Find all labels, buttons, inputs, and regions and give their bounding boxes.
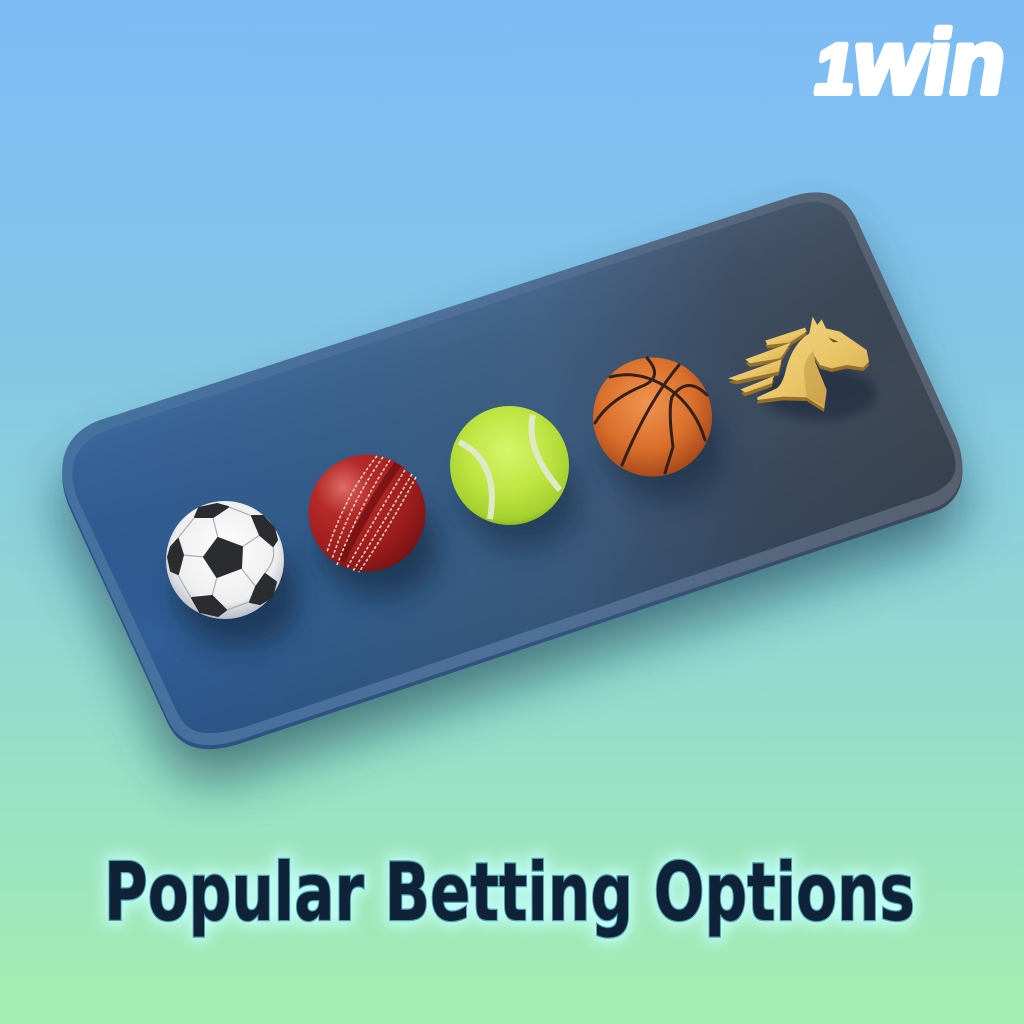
panel thickness edge xyxy=(62,196,962,749)
icon: basketball xyxy=(593,358,726,501)
panel drop shadow xyxy=(62,227,962,780)
panel face xyxy=(72,202,955,733)
horse neck shade and eye xyxy=(804,337,838,407)
icon: soccer ball xyxy=(166,501,300,646)
icon: tennis ball xyxy=(450,406,582,549)
horse body xyxy=(728,317,869,408)
title xyxy=(104,846,915,939)
icon: golden horse xyxy=(728,317,877,420)
horse shadow xyxy=(763,367,877,420)
logo: 1win: 1win xyxy=(809,13,1014,113)
panel rim xyxy=(62,192,962,745)
panel: sports tray xyxy=(62,192,962,780)
horse depth xyxy=(728,320,869,412)
icon: cricket ball xyxy=(308,454,440,597)
